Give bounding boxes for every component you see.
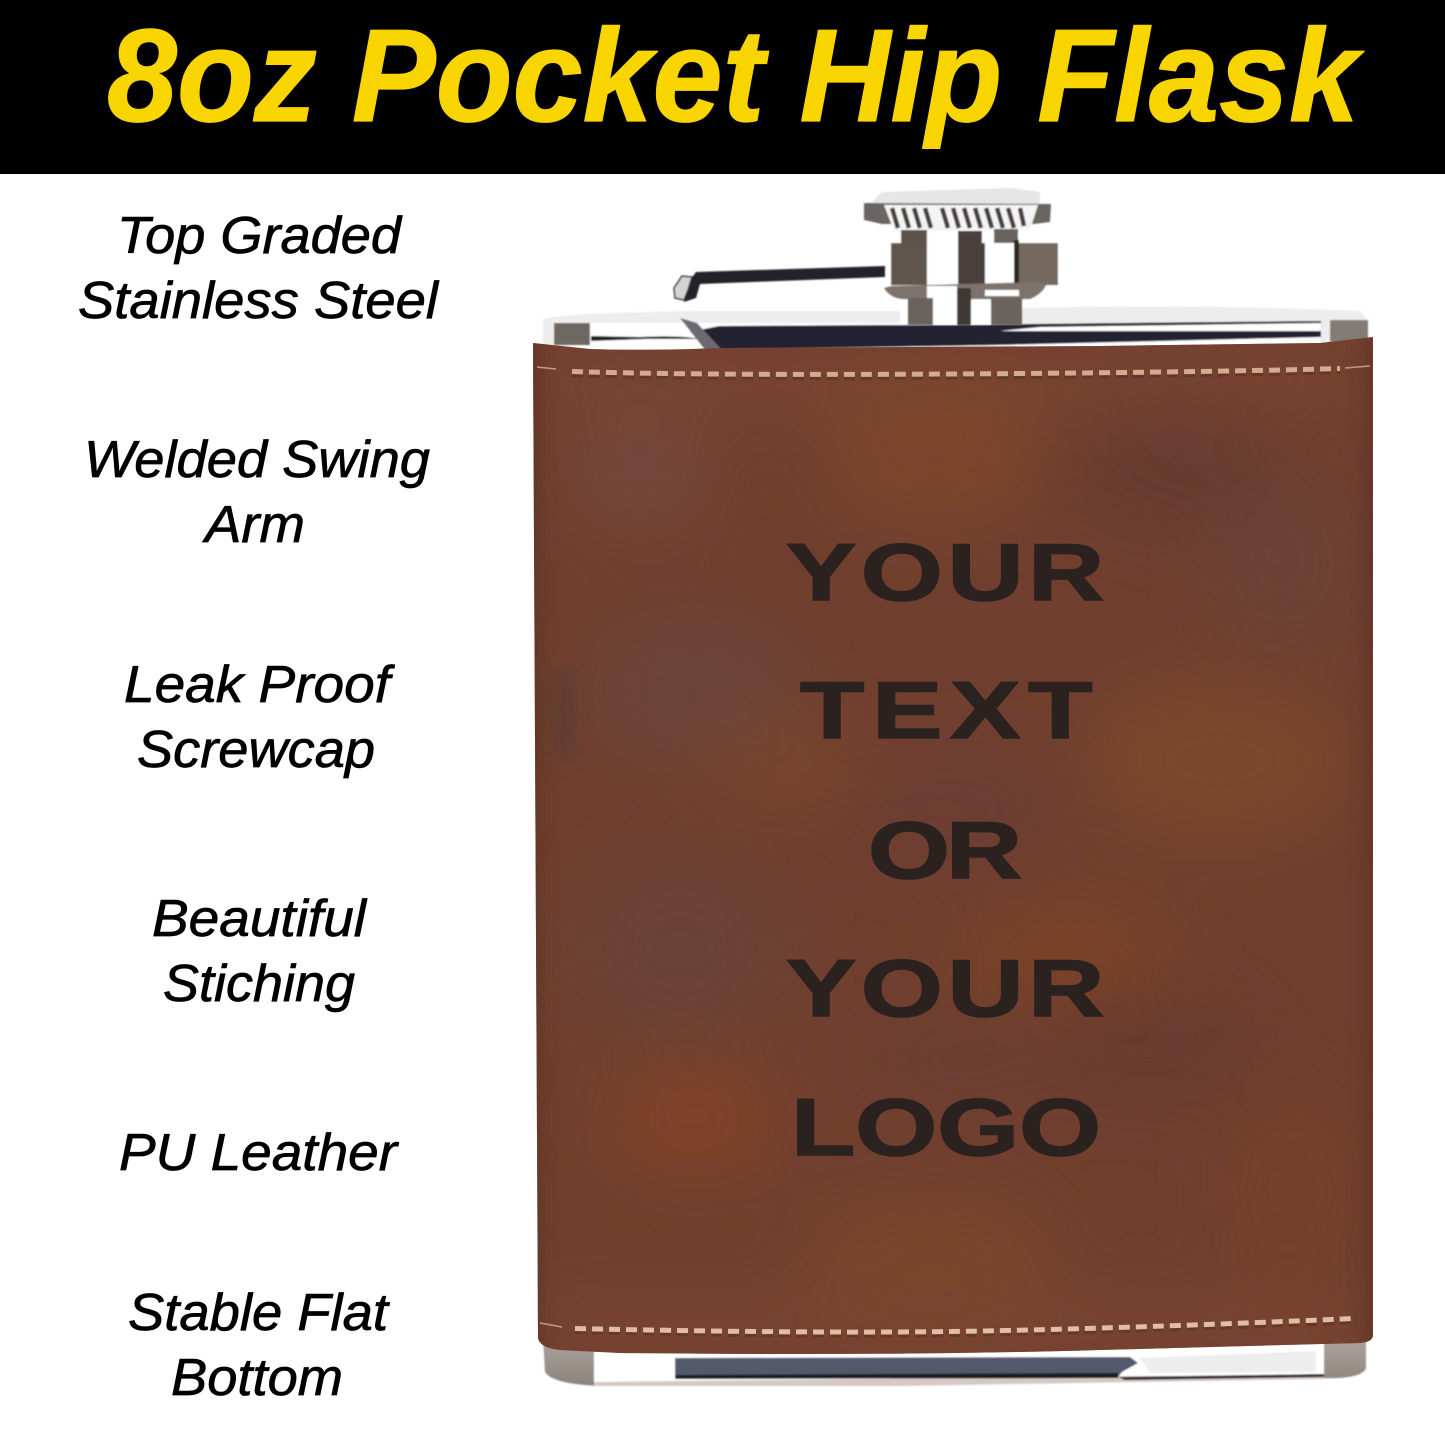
flask steel top xyxy=(543,307,1368,350)
engraved text: LOGO xyxy=(791,1082,1101,1172)
feature: top graded stainless steel: Stainless Steel xyxy=(78,272,440,330)
engraved text xyxy=(786,527,1109,1172)
engraved text: YOUR xyxy=(786,943,1109,1033)
feature: leak proof screwcap: Screwcap xyxy=(137,721,375,779)
feature: top graded stainless steel xyxy=(78,207,440,330)
feature list xyxy=(78,207,440,1407)
swing arm xyxy=(674,266,885,302)
feature: leak proof screwcap: Leak Proof xyxy=(124,656,395,714)
feature: stable flat bottom xyxy=(128,1284,391,1407)
bottom stitching xyxy=(540,1318,1355,1334)
screw cap xyxy=(864,188,1060,325)
engraved text: OR xyxy=(868,805,1020,895)
top stitching xyxy=(537,366,1370,376)
leather edge shading xyxy=(525,335,1380,1360)
feature: top graded stainless steel: Top Graded xyxy=(117,207,403,265)
flask cap and swing arm xyxy=(674,188,1060,325)
feature: pu leather: PU Leather xyxy=(119,1124,400,1182)
feature: beautiful stiching: Beautiful xyxy=(152,890,368,948)
leather wrap xyxy=(525,335,1380,1360)
feature: welded swing arm: Welded Swing xyxy=(84,431,430,489)
flask xyxy=(525,188,1380,1386)
feature: stable flat bottom: Bottom xyxy=(171,1349,343,1407)
flask steel bottom xyxy=(543,1332,1366,1386)
feature: stable flat bottom: Stable Flat xyxy=(128,1284,391,1342)
feature: leak proof screwcap xyxy=(124,656,395,779)
feature: beautiful stiching xyxy=(152,890,368,1013)
engraved text: TEXT xyxy=(800,665,1100,755)
title: 8oz Pocket Hip Flask xyxy=(107,2,1364,149)
feature: beautiful stiching: Stiching xyxy=(163,955,355,1013)
feature: welded swing arm xyxy=(84,431,430,554)
title banner xyxy=(0,0,1445,174)
engraved text: YOUR xyxy=(786,527,1109,617)
feature: welded swing arm: Arm xyxy=(202,496,305,554)
